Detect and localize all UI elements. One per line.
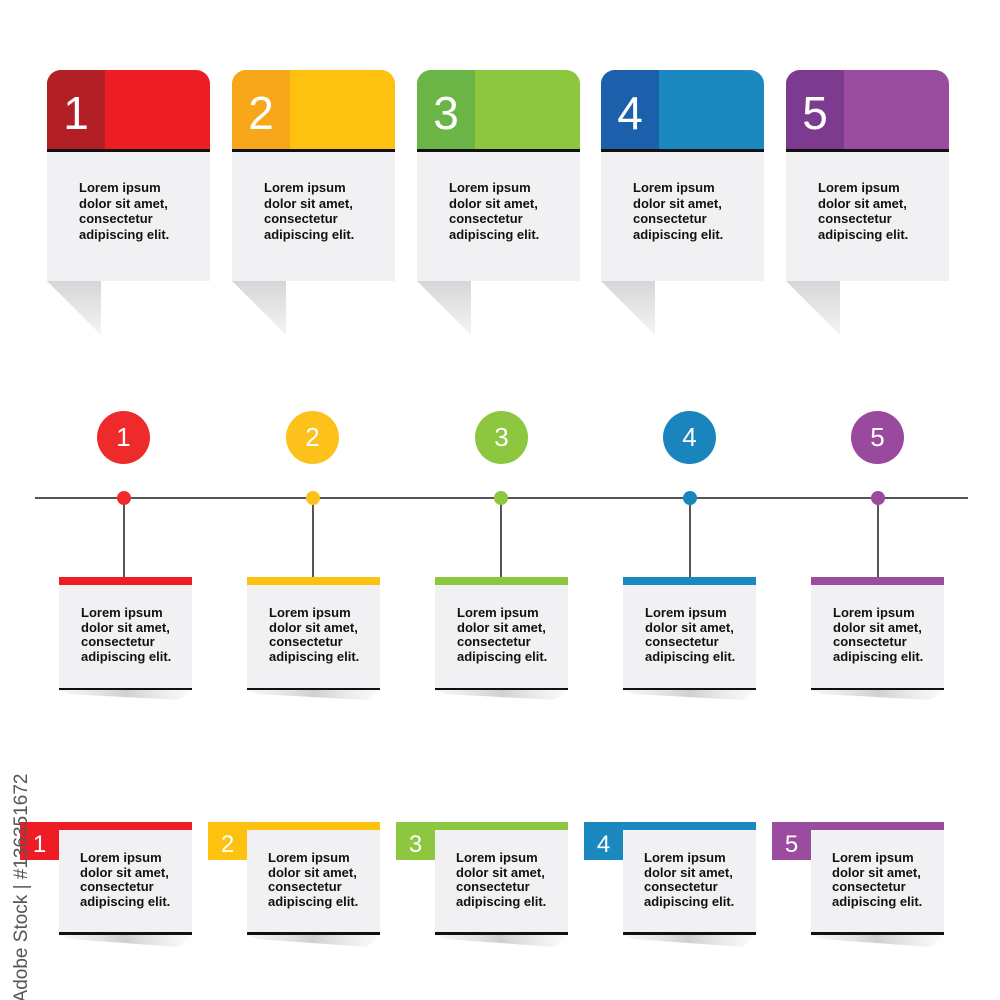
box 4: consectetur xyxy=(644,879,718,894)
box 2: dolor sit amet, xyxy=(268,864,357,880)
step 1 xyxy=(59,411,192,700)
step 5: consectetur xyxy=(833,634,907,649)
card 1: 1 xyxy=(63,87,89,139)
step 4: 4 xyxy=(682,422,697,452)
card 4: dolor sit amet, xyxy=(633,196,722,210)
step 5: Lorem ipsum xyxy=(833,605,915,620)
card 5: 5 xyxy=(802,87,828,139)
box 1: Lorem ipsum xyxy=(80,850,162,865)
step 5: 5 xyxy=(870,422,885,452)
step 5 xyxy=(811,411,944,700)
box 3: adipiscing elit. xyxy=(456,894,546,908)
box 2: consectetur xyxy=(268,879,342,894)
box 2 xyxy=(208,822,380,947)
card 5 xyxy=(786,70,949,334)
step 2: adipiscing elit. xyxy=(269,648,359,664)
step 2 xyxy=(247,411,380,700)
box 5: consectetur xyxy=(832,879,906,894)
step 4: dolor sit amet, xyxy=(645,620,734,634)
step 1: adipiscing elit. xyxy=(81,648,171,664)
step 3: dolor sit amet, xyxy=(457,620,546,634)
box 5: dolor sit amet, xyxy=(832,864,921,880)
box 4: 4 xyxy=(597,831,610,858)
panel: timeline xyxy=(35,411,968,700)
card 3: dolor sit amet, xyxy=(449,196,538,210)
card 5: consectetur xyxy=(818,211,892,226)
step 3: Lorem ipsum xyxy=(457,605,539,620)
box 4: adipiscing elit. xyxy=(644,894,734,908)
box 2: Lorem ipsum xyxy=(268,850,350,865)
box 1: adipiscing elit. xyxy=(80,894,170,908)
box 3: 3 xyxy=(409,831,422,858)
box 1: 1 xyxy=(33,831,46,858)
box 4 xyxy=(584,822,756,947)
card 4: Lorem ipsum xyxy=(633,180,715,195)
step 3 xyxy=(435,411,568,700)
step 4: consectetur xyxy=(645,634,719,649)
card 5: Lorem ipsum xyxy=(818,180,900,195)
box 1: dolor sit amet, xyxy=(80,864,169,880)
card 1 xyxy=(47,70,210,334)
box 5: 5 xyxy=(785,831,798,858)
box 5: Lorem ipsum xyxy=(832,850,914,865)
step 1: consectetur xyxy=(81,634,155,649)
step 4 xyxy=(623,411,756,700)
card 3: 3 xyxy=(433,87,459,139)
watermark side text: Adobe Stock | #136351672 xyxy=(11,774,32,1000)
step 4: adipiscing elit. xyxy=(645,648,735,664)
card 2: Lorem ipsum xyxy=(264,180,346,195)
card 1: dolor sit amet, xyxy=(79,196,168,210)
box 1: consectetur xyxy=(80,879,154,894)
card 1: consectetur xyxy=(79,211,153,226)
card 2 xyxy=(232,70,395,334)
step 2: Lorem ipsum xyxy=(269,605,351,620)
card 1: Lorem ipsum xyxy=(79,180,161,195)
step 3: 3 xyxy=(494,422,509,452)
card 5: dolor sit amet, xyxy=(818,196,907,210)
step 2: 2 xyxy=(305,422,320,452)
timeline line xyxy=(35,497,968,499)
step 2: consectetur xyxy=(269,634,343,649)
box 3: dolor sit amet, xyxy=(456,864,545,880)
box 4: Lorem ipsum xyxy=(644,850,726,865)
box 1 xyxy=(20,822,192,947)
box 3: Lorem ipsum xyxy=(456,850,538,865)
card 3 xyxy=(417,70,580,334)
card 2: adipiscing elit. xyxy=(264,226,354,242)
card 3: adipiscing elit. xyxy=(449,226,539,242)
card 4 xyxy=(601,70,764,334)
card 4: consectetur xyxy=(633,211,707,226)
panel: bottom tabbed boxes xyxy=(20,822,944,947)
step 4: Lorem ipsum xyxy=(645,605,727,620)
box 2: adipiscing elit. xyxy=(268,894,358,908)
box 3: consectetur xyxy=(456,879,530,894)
step 3: adipiscing elit. xyxy=(457,648,547,664)
card 2: 2 xyxy=(248,87,274,139)
card 2: dolor sit amet, xyxy=(264,196,353,210)
box 5: adipiscing elit. xyxy=(832,894,922,908)
step 1: dolor sit amet, xyxy=(81,620,170,634)
card 1: adipiscing elit. xyxy=(79,226,169,242)
box 2: 2 xyxy=(221,831,234,858)
step 1: Lorem ipsum xyxy=(81,605,163,620)
box 3 xyxy=(396,822,568,947)
card 4: 4 xyxy=(617,87,643,139)
box 5 xyxy=(772,822,944,947)
card 3: consectetur xyxy=(449,211,523,226)
panel: top cards row xyxy=(47,70,949,334)
step 5: dolor sit amet, xyxy=(833,620,922,634)
card 5: adipiscing elit. xyxy=(818,226,908,242)
step 5: adipiscing elit. xyxy=(833,648,923,664)
step 2: dolor sit amet, xyxy=(269,620,358,634)
card 3: Lorem ipsum xyxy=(449,180,531,195)
card 2: consectetur xyxy=(264,211,338,226)
step 1: 1 xyxy=(116,422,131,452)
box 4: dolor sit amet, xyxy=(644,864,733,880)
card 4: adipiscing elit. xyxy=(633,226,723,242)
step 3: consectetur xyxy=(457,634,531,649)
